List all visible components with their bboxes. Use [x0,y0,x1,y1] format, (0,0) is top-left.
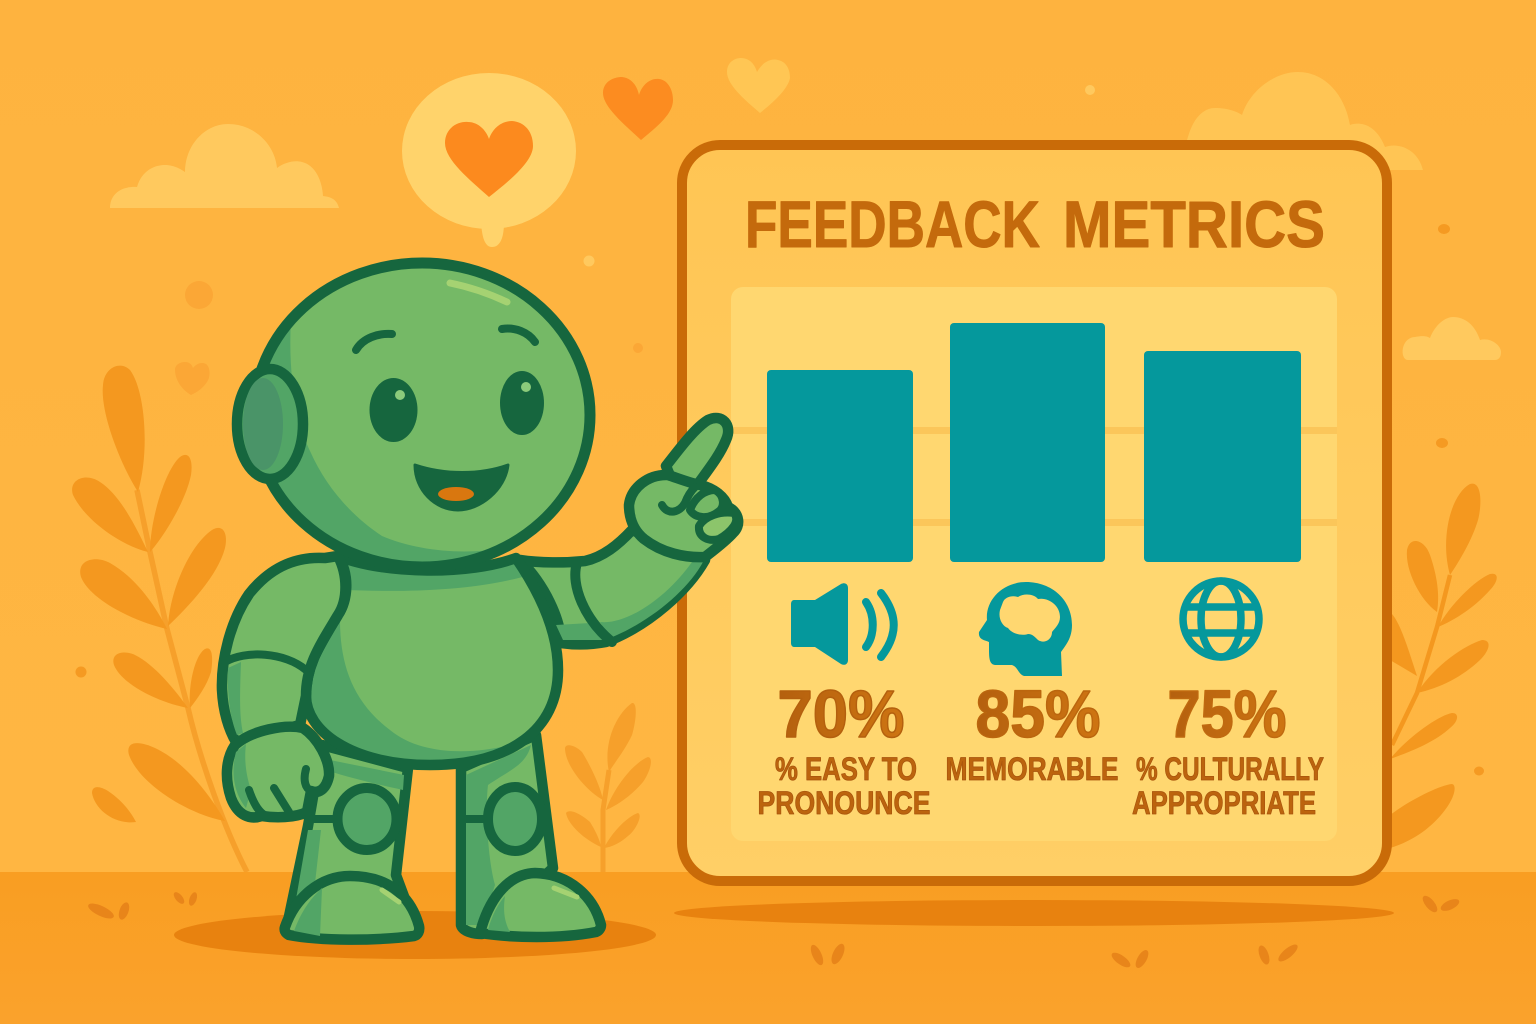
robot: fist [629,475,738,557]
metric: 75 percent culturally appropriate: % CULTURALLY [1136,751,1324,787]
metric: 75 percent culturally appropriate: APPROPRIATE [1132,785,1316,821]
robot: upper left arm [222,556,346,742]
plant: middle [565,703,651,872]
robot: mouth [415,465,508,510]
metric: 85 percent memorable: MEMORABLE [946,751,1118,787]
decorative heart: faded top [727,58,790,113]
bar: culturally appropriate [1144,351,1301,562]
metric: 85 percent memorable: 85% [976,677,1100,752]
robot: pointing arm [520,530,705,644]
heading: METRICS [1063,187,1325,261]
icon: globe [1183,581,1259,657]
robot character [222,240,738,940]
robot: torso [306,556,570,765]
robot: left foot [285,876,419,940]
metric: 70 percent easy to pronounce: 70% [778,677,904,752]
metric: 75 percent culturally appropriate: 75% [1168,677,1286,752]
robot: right eye [500,371,544,435]
robot: head [256,258,596,566]
robot: head highlight [450,283,507,302]
panel: feedback metrics [682,145,1387,881]
robot: right leg [461,735,553,934]
robot: left leg [287,745,415,926]
decorative heart: orange [603,77,673,140]
shadow: robot [174,911,656,959]
plant: right [1390,484,1497,848]
cloud: small right [1403,317,1501,360]
speech bubble with heart [402,73,576,247]
metric: 70 percent easy to pronounce: % EASY TO [775,751,917,787]
ground [0,872,1536,1024]
cloud: top right [1183,72,1423,170]
ground sprouts [86,890,1461,970]
metric: 70 percent easy to pronounce [758,677,930,821]
plant: left [72,366,247,872]
metric: 75 percent culturally appropriate [1132,677,1324,821]
panel: chart background [731,287,1337,841]
icon: head with brain [979,582,1072,676]
metric: 70 percent easy to pronounce: PRONOUNCE [758,785,930,821]
bar: memorable [950,323,1105,562]
heading [745,187,1325,261]
decorative dots [76,85,1484,776]
bar chart [731,323,1337,562]
metric: 85 percent memorable [946,677,1118,787]
shadow: panel [674,900,1394,926]
robot: eyebrows [356,329,535,350]
robot: pointing finger [666,418,728,500]
robot: lowered hand [227,727,329,817]
bar: easy to pronounce [767,370,913,562]
robot: ear [237,369,303,479]
robot: left eye [370,378,418,442]
cloud: top left [110,124,339,208]
icon: speaker [791,583,894,665]
heading: FEEDBACK [745,187,1040,261]
robot: right foot [480,873,601,937]
icon: heart in bubble [445,121,533,197]
decorative heart: small left [175,362,210,395]
